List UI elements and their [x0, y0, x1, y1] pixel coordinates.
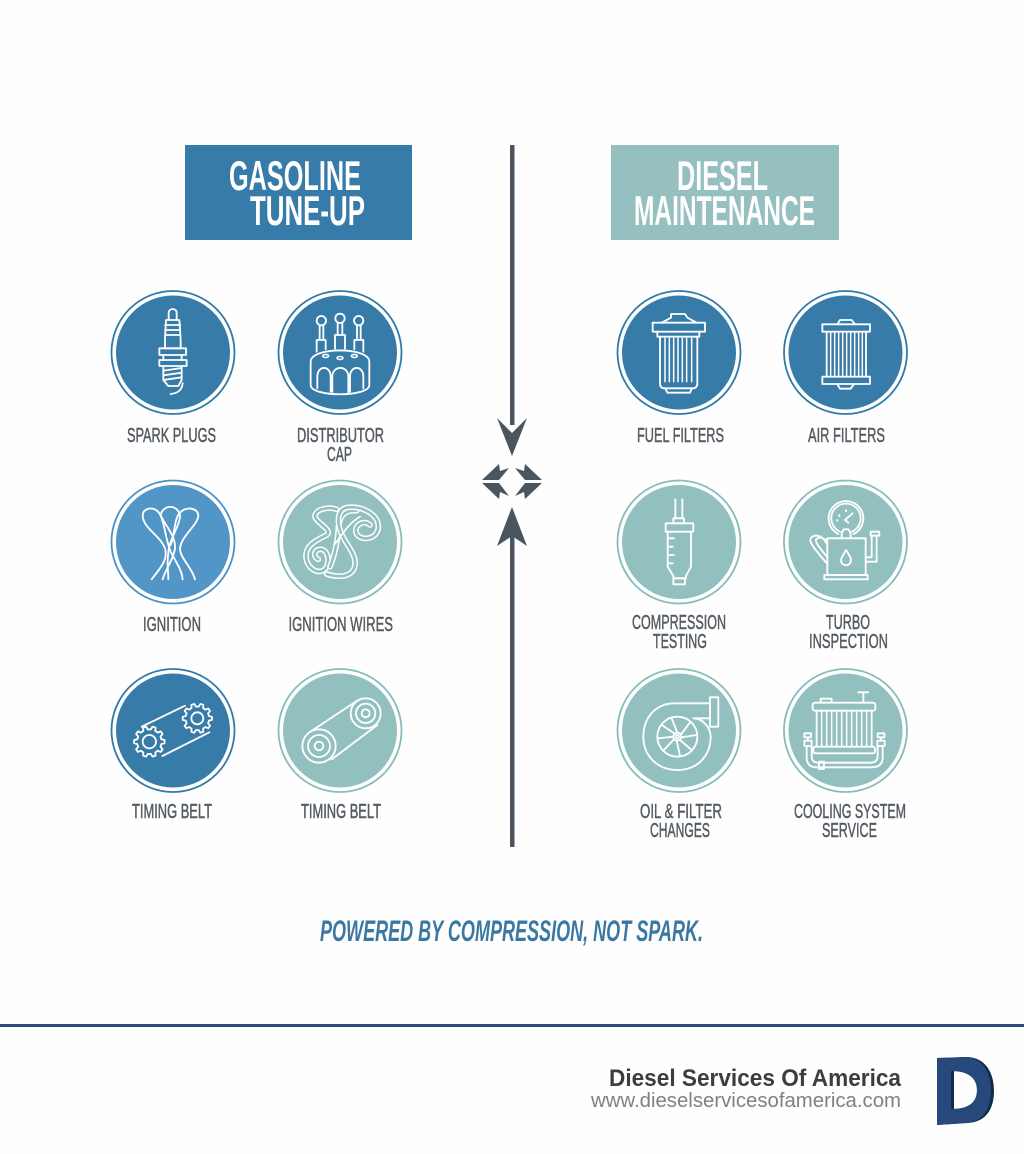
icon: gear timing belt: [134, 704, 212, 757]
header: gasoline tune-up: [185, 145, 412, 240]
icon: spark plug: [159, 309, 187, 394]
icon: turbocharger: [643, 697, 718, 770]
label: fuel filters: FUEL FILTERS: [637, 425, 724, 447]
label: cooling system service: [794, 801, 906, 842]
label: distributor cap: CAP: [327, 444, 352, 466]
icon: radiator: [804, 692, 885, 769]
tagline: POWERED BY COMPRESSION, NOT SPARK.: [320, 915, 703, 948]
label: oil and filter changes: CHANGES: [650, 820, 710, 842]
item: distributor cap: [278, 291, 402, 466]
header: diesel maintenance: [611, 145, 839, 240]
label: compression testing: TESTING: [653, 631, 707, 653]
item: timing belt with gears: [112, 669, 234, 823]
item: cooling system service: [784, 669, 907, 842]
item: spark plugs: [112, 291, 234, 447]
label: turbo inspection: TURBO: [826, 612, 870, 634]
icon: pulley timing belt: [302, 698, 381, 763]
icon: air filter: [822, 320, 870, 389]
label: cooling system service: SERVICE: [822, 820, 877, 842]
logo: letter D: [937, 1057, 994, 1125]
footer brand text: www.dieselservicesofamerica.com: [590, 1090, 901, 1112]
label: distributor cap: DISTRIBUTOR: [297, 425, 384, 447]
label: compression testing: [632, 612, 726, 653]
label: compression testing: COMPRESSION: [632, 612, 726, 634]
item: air filters: [784, 291, 907, 447]
label: ignition wires: IGNITION WIRES: [288, 614, 393, 636]
label: cooling system service: COOLING SYSTEM: [794, 801, 906, 823]
footer brand text: [590, 1065, 902, 1112]
item: timing belt with pulleys: [278, 669, 402, 823]
footer brand text: Diesel Services Of America: [609, 1065, 902, 1092]
label: distributor cap: [297, 425, 384, 466]
header: gasoline tune-up: TUNE-UP: [250, 187, 365, 234]
label: air filters: AIR FILTERS: [808, 425, 885, 447]
icon: tangled wires: [306, 507, 378, 576]
item: ignition wires: [278, 480, 402, 636]
icon: fuel filter: [653, 314, 705, 393]
icon: compression tester: [666, 499, 693, 584]
label: turbo inspection: INSPECTION: [809, 631, 888, 653]
icon: ignition wires bundle: [143, 507, 198, 579]
item: ignition: [112, 480, 234, 636]
center divider with converging arrows: [482, 145, 542, 847]
header: diesel maintenance: MAINTENANCE: [634, 187, 815, 234]
icon: gauge and oil can: [810, 501, 879, 579]
label: oil and filter changes: OIL & FILTER: [640, 801, 722, 823]
item: turbo inspection: [784, 480, 907, 653]
label: timing belt: TIMING BELT: [132, 801, 212, 823]
icon: distributor cap: [311, 314, 369, 394]
header: gasoline tune-up: GASOLINE: [229, 152, 361, 199]
item: compression testing: [618, 480, 740, 653]
header: diesel maintenance: DIESEL: [677, 152, 768, 199]
item: oil and filter changes: [618, 669, 740, 842]
label: ignition: IGNITION: [143, 614, 201, 636]
item: fuel filters: [618, 291, 740, 447]
label: timing belt: TIMING BELT: [301, 801, 381, 823]
footer rule: [0, 1024, 1024, 1027]
label: spark plugs: SPARK PLUGS: [127, 425, 216, 447]
label: oil and filter changes: [640, 801, 722, 842]
label: turbo inspection: [809, 612, 888, 653]
